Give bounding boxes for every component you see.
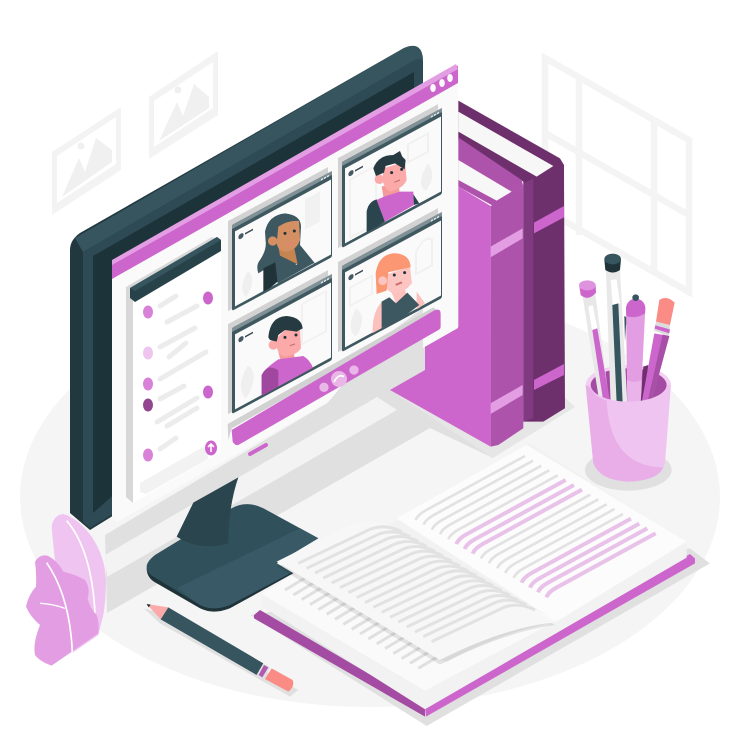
back leaf bbox=[52, 514, 106, 653]
wall picture right bbox=[149, 51, 218, 159]
monitor power pill bbox=[250, 445, 266, 454]
monitor back bbox=[70, 46, 423, 530]
book stack bbox=[390, 101, 565, 447]
pen: dark cap bbox=[604, 254, 627, 403]
floor ellipse bbox=[20, 287, 720, 707]
monitor chin bbox=[300, 308, 423, 436]
pen: lilac cap bbox=[579, 280, 610, 402]
page block bbox=[262, 443, 687, 709]
cup back and shadow bbox=[585, 365, 672, 491]
window header bar bbox=[112, 64, 458, 279]
cup front bbox=[586, 385, 671, 482]
wall picture left bbox=[52, 107, 121, 215]
video tile: man in purple sweater bbox=[228, 268, 332, 416]
back book bbox=[458, 101, 565, 422]
video tile: man in purple shirt bbox=[338, 102, 442, 250]
monitor stand bbox=[147, 477, 318, 612]
call control bar bbox=[228, 307, 441, 445]
plant bbox=[26, 514, 106, 666]
chat panel bbox=[126, 237, 221, 503]
turning page bbox=[277, 521, 555, 665]
floor shadow of monitor bbox=[105, 335, 575, 613]
pencil in cup bbox=[641, 298, 675, 403]
video tile: woman with orange hair bbox=[338, 206, 442, 354]
book shadow bbox=[250, 548, 710, 726]
screen panel bbox=[112, 82, 458, 522]
front book bbox=[390, 137, 523, 447]
marker bbox=[624, 294, 645, 403]
open book bbox=[250, 443, 710, 726]
book cover bbox=[254, 554, 695, 717]
lower page text lines bbox=[285, 578, 438, 668]
front leaf bbox=[26, 555, 99, 666]
pens bbox=[579, 254, 675, 403]
right page text lines bbox=[416, 456, 656, 597]
pencil bbox=[144, 604, 298, 697]
pen cup with pens bbox=[579, 254, 675, 491]
video tile: woman bbox=[228, 165, 332, 313]
wall window bbox=[545, 58, 689, 292]
